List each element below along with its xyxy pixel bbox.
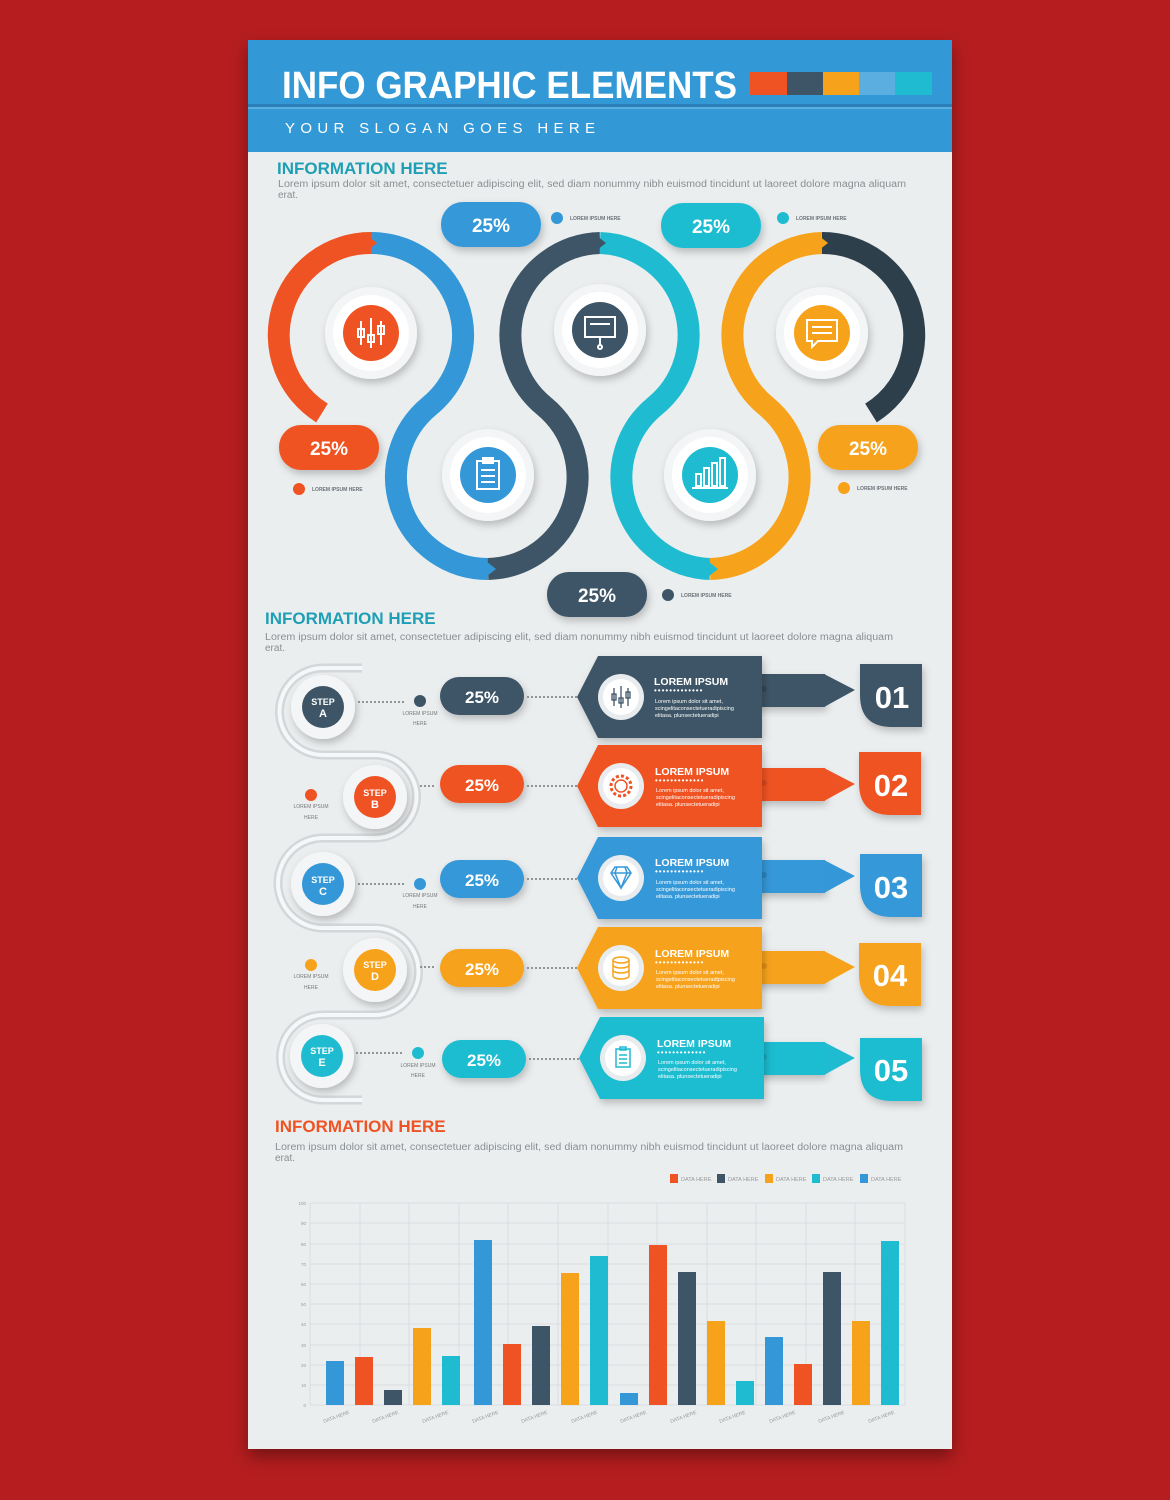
bar chart: DATA HERE — [620, 1410, 648, 1425]
step A row: 01 — [875, 680, 909, 715]
chart legend: DATA HERE — [871, 1177, 902, 1183]
bar chart: 50 — [301, 1302, 306, 1307]
section 1 text: Lorem ipsum dolor sit amet, consectetuer adipiscing elit, sed diam nonummy nibh euismod tincidunt ut laoreet dolore magna aliquam — [278, 179, 906, 190]
step D row: HERE — [304, 985, 319, 991]
percentage pills section 1: 25% — [472, 216, 510, 237]
step B row: 02 — [874, 768, 908, 803]
percentage pills section 1: 25% — [578, 586, 616, 607]
step C row: elitasa. plunsectetueradipi — [656, 894, 720, 900]
step E row: HERE — [411, 1073, 426, 1079]
step D row: LOREM IPSUM — [293, 974, 329, 980]
legend dots section 1: LOREM IPSUM HERE — [312, 487, 363, 493]
bar chart: DATA HERE — [769, 1410, 797, 1425]
percentage pills section 1 — [279, 202, 918, 617]
slogan: YOUR SLOGAN GOES HERE — [285, 120, 595, 137]
bar chart: DATA HERE — [472, 1410, 500, 1425]
step C row: scingelitaconsectetueradipiscing — [656, 887, 735, 893]
bar chart — [298, 1201, 905, 1425]
bar chart: DATA HERE — [323, 1410, 351, 1425]
legend dots section 1 — [293, 212, 908, 601]
section 1 text: erat. — [278, 190, 298, 201]
step E row: LOREM IPSUM — [400, 1063, 436, 1069]
step C row: LOREM IPSUM — [402, 893, 438, 899]
bar chart: DATA HERE — [670, 1410, 698, 1425]
bar chart: 10 — [301, 1383, 306, 1388]
s-curve chart — [279, 243, 914, 569]
section 2 heading: INFORMATION HERE — [265, 609, 436, 628]
arrow tips — [363, 232, 828, 580]
step E row: LOREM IPSUM — [657, 1038, 731, 1050]
legend dots section 1: LOREM IPSUM HERE — [681, 593, 732, 599]
section 2 text: erat. — [265, 643, 285, 654]
step C row: Lorem ipsum dolor sit amet, — [656, 880, 724, 886]
step B row — [293, 745, 921, 829]
step B row: STEP — [363, 788, 387, 798]
header — [248, 40, 952, 152]
step B row: LOREM IPSUM — [293, 804, 329, 810]
chart legend: DATA HERE — [776, 1177, 807, 1183]
step E row: 05 — [874, 1053, 908, 1088]
section 2 text: Lorem ipsum dolor sit amet, consectetuer adipiscing elit, sed diam nonummy nibh euismod tincidunt ut laoreet dolore magna aliquam — [265, 632, 893, 643]
step B row: scingelitaconsectetueradipiscing — [656, 795, 735, 801]
percentage pills section 1: 25% — [849, 439, 887, 460]
color blocks — [750, 72, 932, 95]
step D row — [293, 927, 921, 1009]
percentage pills section 1: 25% — [310, 439, 348, 460]
step E row: Lorem ipsum dolor sit amet, — [658, 1060, 726, 1066]
step A row: HERE — [413, 721, 428, 727]
bar chart: DATA HERE — [571, 1410, 599, 1425]
bar chart: 20 — [301, 1363, 306, 1368]
step B row: Lorem ipsum dolor sit amet, — [656, 788, 724, 794]
step C row: C — [319, 886, 327, 898]
step A row: elitasa. plunsectetueradipi — [655, 713, 719, 719]
step E row: STEP — [310, 1046, 334, 1056]
bar chart: DATA HERE — [422, 1410, 450, 1425]
section 3 text: Lorem ipsum dolor sit amet, consectetuer adipiscing elit, sed diam nonummy nibh euismod tincidunt ut laoreet dolore magna aliquam — [275, 1142, 903, 1153]
bar chart: DATA HERE — [521, 1410, 549, 1425]
step B row: LOREM IPSUM — [655, 766, 729, 778]
step E row: ••••••••••••• — [657, 1048, 706, 1057]
bar chart: 40 — [301, 1322, 306, 1327]
step rows — [290, 656, 922, 1101]
step A row: scingelitaconsectetueradipiscing — [655, 706, 734, 712]
bar chart: 80 — [301, 1242, 306, 1247]
chart legend: DATA HERE — [728, 1177, 759, 1183]
bar chart: DATA HERE — [818, 1410, 846, 1425]
step C row: LOREM IPSUM — [655, 857, 729, 869]
step D row: 04 — [873, 958, 908, 993]
step C row: ••••••••••••• — [655, 867, 704, 876]
legend dots section 1: LOREM IPSUM HERE — [857, 486, 908, 492]
step C row: 25% — [465, 871, 499, 890]
bar chart: 70 — [301, 1262, 306, 1267]
bar chart: 100 — [298, 1201, 306, 1206]
step D row: elitasa. plunsectetueradipi — [656, 984, 720, 990]
step D row: D — [371, 971, 379, 983]
step A row: Lorem ipsum dolor sit amet, — [655, 699, 723, 705]
step E row: E — [318, 1057, 326, 1069]
step A row: STEP — [311, 697, 335, 707]
bar chart: 0 — [303, 1403, 306, 1408]
legend dots section 1: LOREM IPSUM HERE — [796, 216, 847, 222]
step D row: scingelitaconsectetueradipiscing — [656, 977, 735, 983]
step D row: LOREM IPSUM — [655, 948, 729, 960]
step A row: LOREM IPSUM — [402, 711, 438, 717]
step A row: ••••••••••••• — [654, 686, 703, 695]
step B row: elitasa. plunsectetueradipi — [656, 802, 720, 808]
card background — [248, 40, 952, 1449]
step C row: HERE — [413, 904, 428, 910]
step C row: 03 — [874, 870, 908, 905]
icon circles — [325, 284, 868, 521]
step C row — [291, 837, 922, 919]
chart legend — [670, 1174, 902, 1183]
step E row: scingelitaconsectetueradipiscing — [658, 1067, 737, 1073]
bar chart: DATA HERE — [372, 1410, 400, 1425]
step A row: A — [319, 708, 327, 720]
bar chart: 90 — [301, 1221, 306, 1226]
bar chart: 60 — [301, 1282, 306, 1287]
step A row — [291, 656, 922, 739]
section 3 text: erat. — [275, 1153, 295, 1164]
step B row: HERE — [304, 815, 319, 821]
percentage pills section 1: 25% — [692, 217, 730, 238]
bar chart: DATA HERE — [719, 1410, 747, 1425]
step A row: LOREM IPSUM — [654, 676, 728, 688]
step D row: ••••••••••••• — [655, 958, 704, 967]
step A row: 25% — [465, 688, 499, 707]
bar chart: DATA HERE — [868, 1410, 896, 1425]
step path — [278, 668, 418, 1100]
step C row: STEP — [311, 875, 335, 885]
title: INFO GRAPHIC ELEMENTS — [282, 65, 737, 107]
legend dots section 1: LOREM IPSUM HERE — [570, 216, 621, 222]
step E row — [290, 1017, 922, 1101]
chart legend: DATA HERE — [681, 1177, 712, 1183]
step B row: B — [371, 799, 379, 811]
step D row: STEP — [363, 960, 387, 970]
step E row: elitasa. plunsectetueradipi — [658, 1074, 722, 1080]
section 1 heading: INFORMATION HERE — [277, 159, 448, 178]
step D row: Lorem ipsum dolor sit amet, — [656, 970, 724, 976]
bar chart: 30 — [301, 1343, 306, 1348]
step B row: ••••••••••••• — [655, 776, 704, 785]
step B row: 25% — [465, 776, 499, 795]
section 3 heading: INFORMATION HERE — [275, 1117, 446, 1136]
step E row: 25% — [467, 1051, 501, 1070]
step D row: 25% — [465, 960, 499, 979]
chart legend: DATA HERE — [823, 1177, 854, 1183]
